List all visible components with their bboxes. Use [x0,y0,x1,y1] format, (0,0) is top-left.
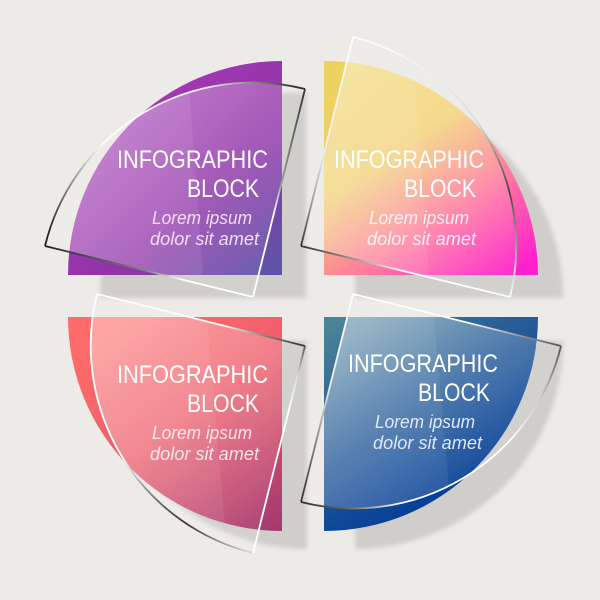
panel: bottom-left red block [60,290,310,555]
body text [367,208,477,249]
panel: top-right yellow-pink block [300,30,540,300]
panel: top-left purple block [40,60,310,300]
glass sheet [300,293,562,510]
panel: bottom-right blue block [300,290,565,540]
heading [334,146,484,203]
body text: Lorem ipsum [369,208,469,228]
body text: dolor sit amet [150,229,260,249]
yellow-pink quadrant [324,61,538,275]
heading: BLOCK [187,175,259,203]
blue quadrant [324,317,538,531]
heading: INFOGRAPHIC [348,350,498,378]
heading: BLOCK [418,379,490,407]
heading [348,350,498,407]
body text: dolor sit amet [367,229,477,249]
body text: dolor sit amet [150,444,260,464]
body text: Lorem ipsum [375,412,475,432]
body text: Lorem ipsum [152,208,252,228]
heading [117,361,268,418]
body text: dolor sit amet [373,433,483,453]
purple quadrant [68,61,282,275]
shadows [99,90,563,549]
body text [373,412,483,453]
heading: INFOGRAPHIC [117,361,268,389]
heading: BLOCK [187,390,259,418]
heading: BLOCK [404,175,476,203]
heading: INFOGRAPHIC [117,146,268,174]
heading [117,146,268,203]
body text [150,423,260,464]
glass sheet [44,82,306,298]
glass sheet [90,293,306,554]
heading: INFOGRAPHIC [334,146,484,174]
glass sheet [300,36,518,298]
body text: Lorem ipsum [152,423,252,443]
red quadrant [68,317,282,531]
body text [150,208,260,249]
